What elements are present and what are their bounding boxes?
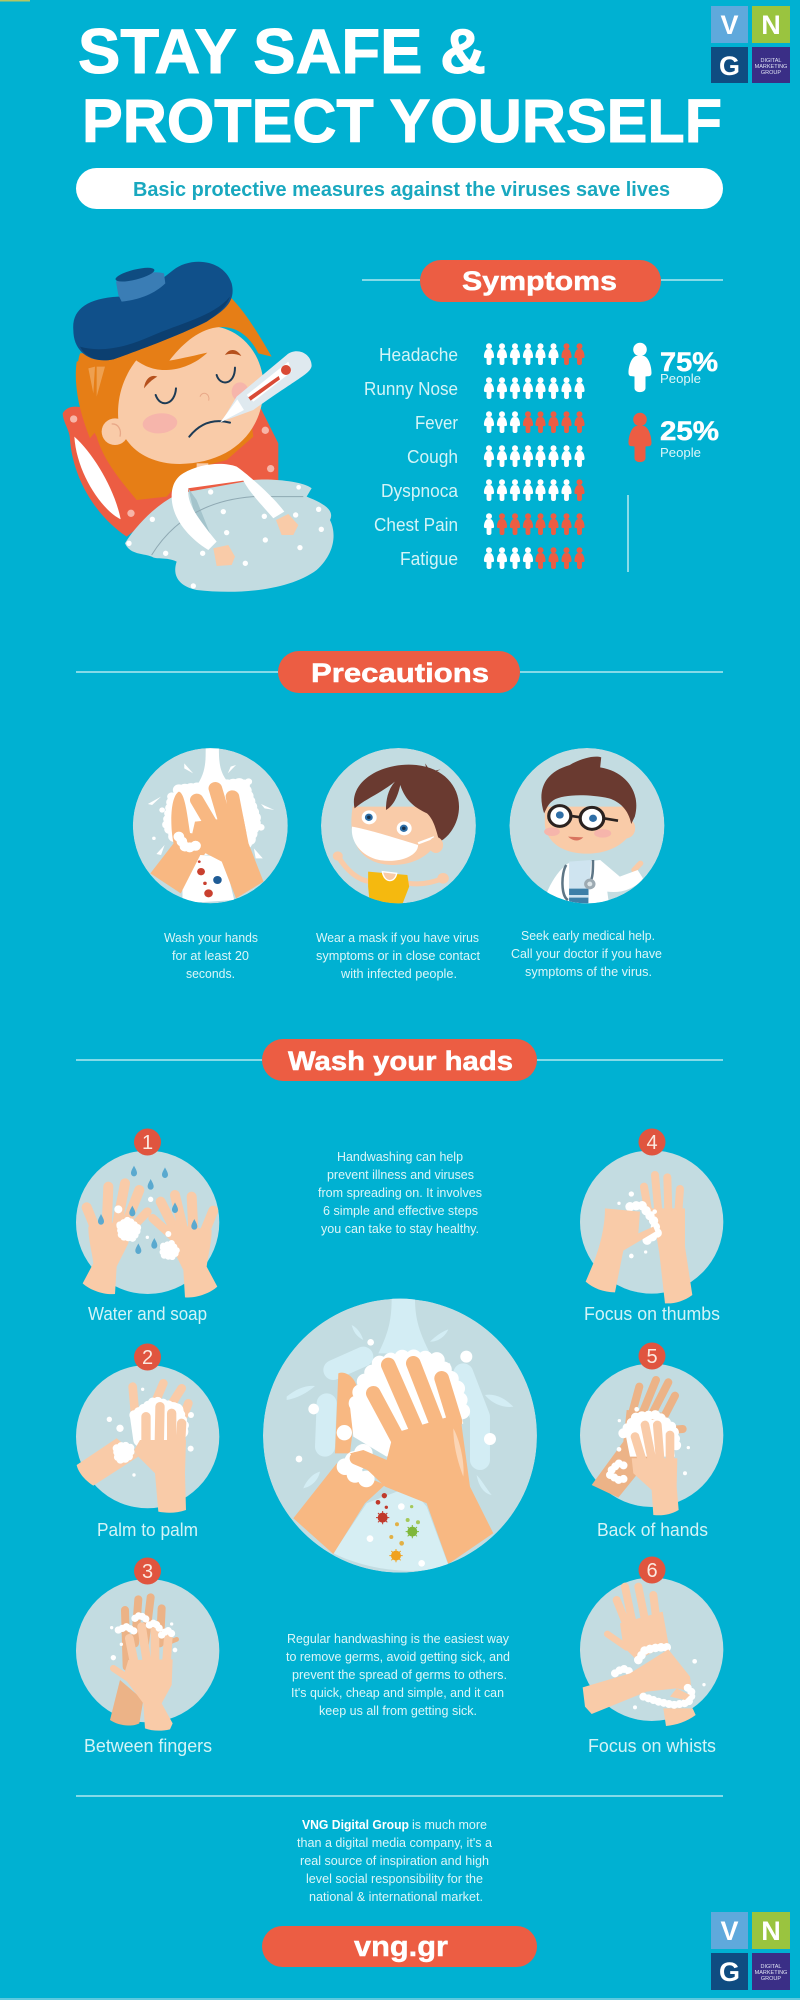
- company text: is much more: [412, 1817, 487, 1832]
- pictogram row: Chest Pain: Chest Pain: [374, 515, 458, 535]
- logo: top: V: [720, 10, 739, 40]
- pictogram row: Cough: [407, 445, 585, 467]
- logo: bottom: G: [719, 1957, 740, 1987]
- heading: Precautions: [76, 651, 723, 693]
- logo: top: DIGITAL: [760, 58, 782, 64]
- title: [78, 17, 722, 155]
- company text: [297, 1817, 493, 1904]
- intro text: you can take to stay healthy.: [321, 1221, 479, 1236]
- logo: top: N: [761, 10, 781, 40]
- precaution text: seek medical help: Seek early medical help.: [521, 928, 655, 943]
- precaution text: seek medical help: Call your doctor if you have: [511, 946, 662, 961]
- precaution illustrations: [133, 748, 288, 903]
- pictogram row: Dyspnoca: [381, 479, 585, 501]
- precaution text: seek medical help: [511, 928, 662, 979]
- step 3: between fingers: [76, 1558, 219, 1756]
- logo: top: GROUP: [761, 70, 781, 76]
- pictogram row: Chest Pain: [374, 513, 585, 535]
- logo: bottom: GROUP: [761, 1976, 781, 1982]
- pictogram row: Headache: [379, 343, 585, 365]
- pictogram row: Dyspnoca: Dyspnoca: [381, 481, 459, 501]
- step 4: focus on thumbs: 4: [646, 1132, 658, 1154]
- step 6: focus on whists: 6: [646, 1560, 658, 1582]
- step 2: palm to palm: 2: [142, 1347, 153, 1369]
- logo: bottom: DIGITAL: [760, 1964, 782, 1970]
- precaution text: wash hands: Wash your hands: [164, 930, 258, 945]
- logo: top: [711, 6, 790, 83]
- legend: 25% people: People: [660, 445, 701, 460]
- pictogram row: Runny Nose: Runny Nose: [364, 379, 458, 399]
- heading: Precautions: Precautions: [311, 658, 489, 688]
- company text: than a digital media company, it's a: [297, 1835, 493, 1850]
- pictogram row: Fever: [415, 411, 585, 433]
- intro text: from spreading on. It involves: [318, 1185, 482, 1200]
- logo: bottom: N: [761, 1916, 781, 1946]
- icon: washing hands: [133, 748, 288, 903]
- intro text: 6 simple and effective steps: [323, 1203, 478, 1218]
- step 2: palm to palm: Palm to palm: [97, 1520, 198, 1540]
- pictogram row: Runny Nose: [364, 377, 585, 399]
- handwashing text: It's quick, cheap and simple, and it can: [291, 1685, 504, 1700]
- pictogram row: Fatigue: Fatigue: [400, 549, 458, 569]
- step 2: palm to palm: [76, 1344, 219, 1540]
- logo: bottom: MARKETING: [755, 1970, 787, 1976]
- company text: national & international market.: [309, 1889, 483, 1904]
- heading: Wash your hads: [76, 1039, 723, 1081]
- precaution text: wear a mask: with infected people.: [340, 966, 457, 981]
- title: PROTECT YOURSELF: [82, 87, 722, 155]
- subtitle pill: [76, 168, 723, 209]
- company text: level social responsibility for the: [306, 1871, 483, 1886]
- subtitle pill: Basic protective measures against the viruses save lives: [133, 179, 670, 201]
- step 6: focus on whists: Focus on whists: [588, 1736, 716, 1756]
- pictogram row: Fatigue: [400, 547, 585, 569]
- legend: 75% people: People: [660, 371, 701, 386]
- logo: top: MARKETING: [755, 64, 787, 70]
- legend: 25% people: [628, 413, 719, 462]
- legend: 75% people: [628, 343, 718, 392]
- handwashing text: Regular handwashing is the easiest way: [287, 1631, 509, 1646]
- step 5: back of hands: 5: [646, 1346, 658, 1368]
- step 4: focus on thumbs: [580, 1128, 723, 1324]
- title: STAY SAFE &: [78, 17, 486, 87]
- illustration: sick girl in bed: [63, 262, 334, 592]
- precaution text: wear a mask: [316, 930, 480, 981]
- handwashing text: to remove germs, avoid getting sick, and: [286, 1649, 510, 1664]
- precaution text: wash hands: [164, 930, 258, 981]
- precaution text: wear a mask: symptoms or in close contact: [316, 948, 480, 963]
- logo: top: G: [719, 51, 740, 81]
- company text: VNG Digital Group: [302, 1817, 409, 1832]
- website pill: [262, 1926, 537, 1967]
- step 1: water and soap: [76, 1128, 219, 1324]
- precaution text: wash hands: seconds.: [186, 966, 235, 981]
- icon: doctor: [509, 748, 664, 905]
- precaution text: wash hands: for at least 20: [172, 948, 249, 963]
- precaution text: wear a mask: Wear a mask if you have virus: [316, 930, 479, 945]
- legend: 75% people: 75%: [660, 347, 718, 377]
- center illustration: hands under water: [263, 1298, 537, 1573]
- website pill: vng.gr: [354, 1931, 448, 1963]
- logo: bottom: V: [720, 1916, 739, 1946]
- step 1: water and soap: 1: [142, 1132, 153, 1154]
- heading: Symptoms: Symptoms: [462, 266, 617, 296]
- step 3: between fingers: Between fingers: [84, 1736, 212, 1756]
- intro text: Handwashing can help: [337, 1149, 463, 1164]
- step 1: water and soap: Water and soap: [88, 1304, 207, 1324]
- company text: real source of inspiration and high: [300, 1853, 489, 1868]
- step 4: focus on thumbs: Focus on thumbs: [584, 1304, 720, 1324]
- pictogram row: Cough: Cough: [407, 447, 458, 467]
- handwashing text: [286, 1631, 510, 1718]
- precaution text: seek medical help: symptoms of the virus.: [525, 964, 652, 979]
- handwashing text: keep us all from getting sick.: [319, 1703, 477, 1718]
- step 5: back of hands: Back of hands: [597, 1520, 708, 1540]
- pictogram row: Fever: Fever: [415, 413, 458, 433]
- step 6: focus on whists: [580, 1556, 723, 1756]
- handwashing text: prevent the spread of germs to others.: [292, 1667, 507, 1682]
- heading: Wash your hads: Wash your hads: [288, 1046, 513, 1076]
- legend: 25% people: 25%: [660, 416, 719, 446]
- icon: child with mask: [321, 748, 476, 905]
- intro text: prevent illness and viruses: [327, 1167, 474, 1182]
- step 5: back of hands: [580, 1342, 723, 1540]
- logo: bottom: [711, 1912, 790, 1990]
- pictogram row: Headache: Headache: [379, 345, 458, 365]
- step 3: between fingers: 3: [142, 1561, 153, 1583]
- heading: Symptoms: [362, 260, 723, 302]
- intro text: [318, 1149, 482, 1236]
